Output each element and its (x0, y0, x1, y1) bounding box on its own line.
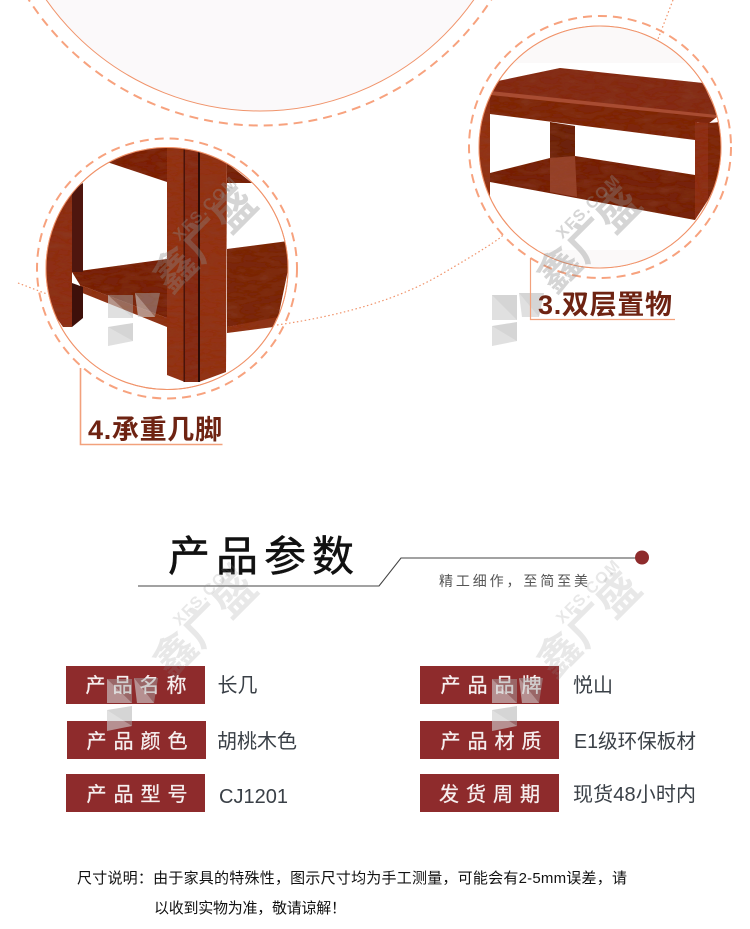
watermark: lower right (492, 556, 650, 731)
panel: top circle detail (0, 0, 536, 126)
photo: two-tier table (480, 26, 720, 268)
row: brand: 产品品牌 (440, 674, 548, 697)
row: delivery: 现货48小时内 (573, 783, 696, 806)
callout: 3 double-layer storage (530, 258, 675, 320)
watermark: upper left: XFS.COM (170, 173, 241, 244)
heading: product parameters: 精工细作，至简至美 (439, 573, 588, 589)
watermark: lower left: XFS.COM (170, 558, 241, 629)
panel: circle 3 double-layer table (469, 16, 731, 278)
watermark: lower right: XFS.COM (553, 556, 624, 627)
row: model number: 产品型号 (86, 783, 194, 806)
row: brand (420, 666, 613, 704)
row: material (420, 721, 696, 759)
watermark: upper left: 鑫广盛 (144, 179, 266, 301)
row: product colour: 胡桃木色 (217, 730, 297, 753)
row: delivery (420, 774, 696, 812)
callout: 4 sturdy leg (80, 368, 222, 445)
watermark: lower left (107, 558, 266, 731)
size note: 以收到实物为准，敬请谅解！ (154, 900, 346, 917)
watermark: upper right (492, 171, 650, 346)
row: product colour (67, 721, 297, 759)
row: product name (66, 666, 258, 704)
row: product name: 产品名称 (86, 674, 194, 697)
decorative dotted connector lines (18, 0, 673, 325)
heading: product parameters: 产品参数 (168, 533, 360, 580)
row: material: E1级环保板材 (574, 730, 696, 753)
callout: 4 sturdy leg: 4.承重几脚 (88, 415, 222, 445)
heading: product parameters (138, 533, 649, 589)
watermark: upper left (108, 173, 266, 346)
row: model number (66, 774, 288, 812)
panel: circle 4 sturdy table leg (37, 138, 297, 398)
row: product name: 长几 (218, 674, 258, 697)
photo: table leg and shelf (44, 147, 288, 382)
size note (77, 870, 627, 917)
row: product colour: 产品颜色 (86, 730, 194, 753)
watermark: upper right: XFS.COM (553, 171, 624, 242)
watermark: upper right: 鑫广盛 (528, 179, 650, 301)
row: delivery: 发货周期 (439, 783, 547, 806)
watermark: lower left: 鑫广盛 (144, 564, 266, 686)
watermark: lower right: 鑫广盛 (528, 564, 650, 686)
row: material: 产品材质 (440, 730, 548, 753)
callout: 3 double-layer storage: 3.双层置物 (538, 290, 672, 320)
size note: 尺寸说明：由于家具的特殊性，图示尺寸均为手工测量，可能会有2-5mm误差，请 (77, 870, 627, 887)
row: brand: 悦山 (573, 674, 613, 697)
row: model number: CJ1201 (219, 786, 288, 808)
